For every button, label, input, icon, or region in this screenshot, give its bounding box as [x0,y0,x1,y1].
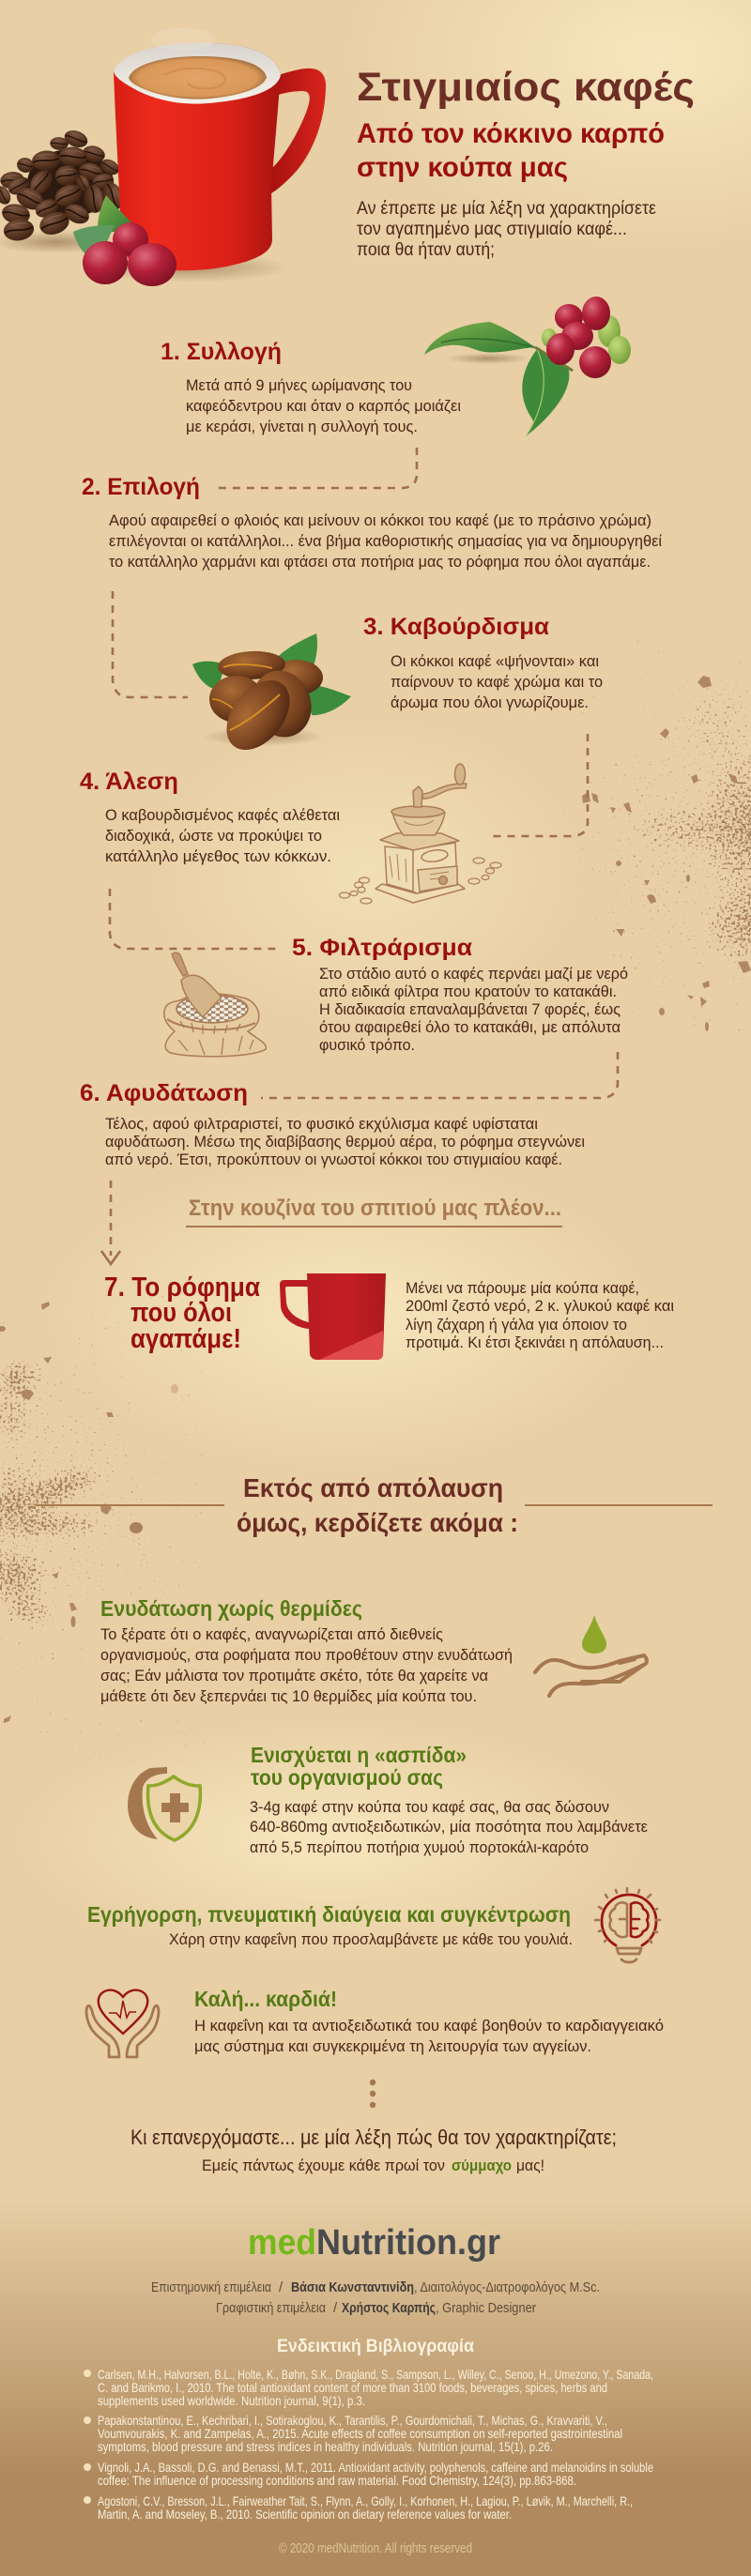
step 4 text: Ο καβουρδισμένος καφές αλέθεται [105,806,340,824]
bibliography list: Papakonstantinou, E., Kechribari, I., Sotirakoglou, K., Tarantilis, P., Gourdomichali, T., Michas, G., Kravvariti, V., [98,2413,607,2428]
step 6 text: Τέλος, αφού φιλτραριστεί, το φυσικό εκχύλισμα καφέ υφίσταται [105,1115,538,1133]
step 5 text: Στο στάδιο αυτό ο καφές περνάει μαζί με νερό [319,965,628,983]
step 3 heading: 3. Καβούρδισμα [363,614,550,640]
credits: Χρήστος Καρπής [342,2300,436,2316]
intro text: τον αγαπημένο μας στιγμιαίο καφέ... [357,220,627,239]
leaves [98,195,134,232]
step 5 text: Η διαδικασία επαναλαμβάνεται 7 φορές, έως [319,1000,621,1018]
illustration: coffee grinder [340,764,501,904]
benefit 1 text: οργανισμούς, στα ροφήματα που προθέτουν στην ενυδάτωσή [100,1646,513,1664]
steam [151,28,215,51]
intro text [357,199,656,260]
mug body [114,43,281,270]
benefit 2 text: από 5,5 περίπου ποτήρια χυμού πορτοκάλι-καρότο [250,1838,589,1856]
kitchen subheading with underline: Στην κουζίνα του σπιτιού μας πλέον... [189,1196,561,1221]
coffee surface [129,56,267,99]
closing line: σύμμαχο [452,2157,512,2174]
mug handle [271,69,326,193]
hero illustration: red mug with beans and cherries [0,28,326,286]
step 7 heading: αγαπάμε! [130,1324,241,1354]
credits: Γραφιστική επιμέλεια [216,2300,326,2316]
bibliography list: Voumvourakis, K. and Zampelas, A., 2015. Acute effects of coffee consumption on self-reported gastrointestinal [98,2426,622,2441]
step 6 text: αφυδάτωση. Μέσω της διαβίβασης θερμού αέρα, το ρόφημα στεγνώνει [105,1133,585,1151]
section heading: benefits: Εκτός από απόλαυση [243,1473,503,1502]
bibliography list: C. and Barikmo, I., 2010. The total antioxidant content of more than 3100 foods, beverages, spices, herbs and [98,2380,607,2395]
subtitle: στην κούπα μας [357,152,568,183]
benefit 2 heading: Ενισχύεται η «ασπίδα» [251,1743,467,1767]
step 7 text: 200ml ζεστό νερό, 2 κ. γλυκού καφέ και [406,1297,674,1315]
step 6 text: από νερό. Έτσι, προκύπτουν οι γνωστοί κόκκοι του στιγμιαίου καφέ. [105,1151,562,1168]
copyright: © 2020 medNutrition. All rights reserved [279,2540,472,2556]
connector 4 to 5 [110,889,280,949]
step 6 heading: 6. Αφυδάτωση [80,1080,248,1106]
cherries [113,222,148,256]
step 3 text: παίρνουν το καφέ χρώμα και το [391,673,603,691]
mug rim [114,43,281,104]
step 4 text: διαδοχικά, ώστε να προκύψει το [105,827,322,845]
scattered grinder beans [340,858,501,904]
step 7 text: Μένει να πάρουμε μία κούπα καφέ, [406,1279,639,1297]
step 6 text [105,1115,585,1168]
benefit 2 heading: του οργανισμού σας [251,1765,443,1790]
step 1 text: Μετά από 9 μήνες ωρίμανσης του [186,376,412,394]
credits: , Διαιτολόγος-Διατροφολόγος M.Sc. [414,2279,600,2295]
closing line: μας! [516,2157,544,2174]
benefit 3 text: Χάρη στην καφεΐνη που προσλαμβάνετε με κάθε του γουλιά. [169,1930,573,1948]
icon: drop over hand [535,1615,647,1696]
step 2 text [109,511,662,571]
step 2 heading: 2. Επιλογή [82,474,200,500]
bibliography heading: Ενδεικτική Βιβλιογραφία [277,2337,474,2356]
step 7 text: προτιμά. Κι έτσι ξεκινάει η απόλαυση... [406,1334,664,1351]
benefit 1 text: Το ξέρατε ότι ο καφές, αναγνωρίζεται από διεθνείς [100,1625,443,1643]
benefit 1 text: μάθετε ότι δεν ξεπερνάει τις 10 θερμίδες μία κούπα του. [100,1687,477,1705]
intro text: Αν έπρεπε με μία λέξη να χαρακτηρίσετε [357,199,656,219]
step 1 heading: 1. Συλλογή [161,339,282,365]
credits: / [333,2300,338,2316]
step 1 text: καφεόδεντρου και όταν ο καρπός μοιάζει [186,397,461,415]
arrow to step 7 [101,1181,120,1264]
step 7 heading: 7. Το ρόφημα [104,1273,260,1303]
step 7 heading [104,1273,260,1354]
subtitle [357,118,665,183]
bibliography list: Martin, A. and Moseley, B., 2010. Scientific opinion on dietary reference values for water. [98,2507,512,2522]
benefit 2 text [250,1798,648,1856]
step 4 text [105,806,340,865]
bibliography list [84,2367,653,2522]
step 7 text: λίγη ζάχαρη ή γάλα για όποιον το [406,1316,627,1334]
benefit 1 text: σας; Εάν μάλιστα τον προτιμάτε σκέτο, τότε θα χαρείτε να [100,1667,488,1684]
spatter flakes [0,676,751,1723]
coffee beans pile [0,128,127,242]
benefit 3 heading: Εγρήγορση, πνευματική διαύγεια και συγκέντρωση [87,1902,571,1927]
illustration: coffee branch with cherries [424,297,631,436]
step 3 text [391,652,603,711]
step 1 text: με κεράσι, γίνεται η συλλογή τους. [186,418,418,435]
step 5 text: φυσικό τρόπο. [319,1036,415,1054]
benefit 2 text: 640-860mg αντιοξειδωτικών, μία ποσότητα που λαμβάνετε [250,1818,648,1836]
credits: , Graphic Designer [436,2300,536,2316]
connector 5 to 6 [261,1052,618,1098]
illustration: roasted beans with leaves [192,633,351,762]
bibliography list: symptoms, blood pressure and stress indices in healthy individuals. Nutrition journal, 15(1), p.26. [98,2439,553,2454]
step 3 text: άρωμα που όλοι γνωρίζουμε. [391,694,589,711]
benefit 4 heading: Καλή... καρδιά! [194,1987,337,2011]
connector 3 to 4 [489,734,588,836]
three dots [370,2080,376,2108]
credits: Επιστημονική επιμέλεια [151,2279,271,2295]
step 4 text: κατάλληλο μέγεθος των κόκκων. [105,847,331,865]
logo: med [248,2223,316,2263]
closing question: Κι επανερχόμαστε... με μία λέξη πώς θα τον χαρακτηρίζατε; [130,2126,617,2149]
icon: brain bulb [595,1888,660,1962]
connector 1 to 2 [216,448,417,488]
closing line: Εμείς πάντως έχουμε κάθε πρωί τον [202,2157,445,2174]
credits: / [279,2279,284,2295]
step 3 text: Οι κόκκοι καφέ «ψήνονται» και [391,652,599,670]
section heading: benefits: όμως, κερδίζετε ακόμα : [237,1508,518,1537]
benefit 4 text: μας σύστημα και συγκεκριμένα τη λειτουργία των αγγείων. [194,2037,591,2055]
credits: Βάσια Κωνσταντινίδη [291,2279,414,2295]
bibliography list: coffee: The influence of processing conditions and raw material. Food Chemistry, 124(3), pp.863-868. [98,2473,576,2488]
step 2 text: επιλέγονται οι κατάλληλοι... ένα βήμα καθοριστικής σημασίας για να δημιουργηθεί [109,532,662,550]
icon: heart in hands [86,1990,159,2057]
step 2 text: το κατάλληλο χαρμάνι και φτάσει στα ποτήρια μας το ρόφημα που όλοι αγαπάμε. [109,553,651,571]
benefit 1 text [100,1625,513,1705]
benefit 4 text [194,2017,664,2055]
step 7 text [406,1279,674,1351]
step 5 text [319,965,628,1054]
step 1 text [186,376,461,435]
intro text: ποια θα ήταν αυτή; [357,240,495,260]
logo: Nutrition.gr [316,2223,500,2263]
benefit 2 text: 3-4g καφέ στην κούπα του καφέ σας, θα σας δώσουν [250,1798,609,1816]
subtitle: Από τον κόκκινο καρπό [357,118,665,149]
illustration: flat red mug [280,1273,386,1360]
connector 2 to 3 [113,591,188,697]
section heading: benefits [36,1473,713,1537]
title: Στιγμιαίος καφές [357,65,695,110]
step 5 heading: 5. Φιλτράρισμα [292,935,473,961]
credits [151,2279,600,2316]
step 2 text: Αφού αφαιρεθεί ο φλοιός και μείνουν οι κόκκοι του καφέ (με το πράσινο χρώμα) [109,511,651,529]
step 5 text: ότου αφαιρεθεί όλο το κατακάθι, με απόλυτα [319,1018,621,1036]
benefit 4 text: Η καφεΐνη και τα αντιοξειδωτικά του καφέ βοηθούν το καρδιαγγειακό [194,2017,664,2035]
coffee spatter right [573,666,751,1023]
illustration: sack of coffee beans [164,953,266,1057]
benefit 2 heading [251,1743,467,1790]
benefit 1 heading: Ενυδάτωση χωρίς θερμίδες [100,1596,362,1621]
bibliography list: supplements used worldwide. Nutrition journal, 9(1), p.3. [98,2393,365,2408]
coffee spatter left [0,1333,164,1689]
step 7 heading: που όλοι [130,1298,232,1328]
step 4 heading: 4. Άλεση [80,769,178,795]
icon: shield [128,1767,200,1840]
step 5 text: από ειδικά φίλτρα που κρατούν το κατακάθι. [319,983,617,1000]
